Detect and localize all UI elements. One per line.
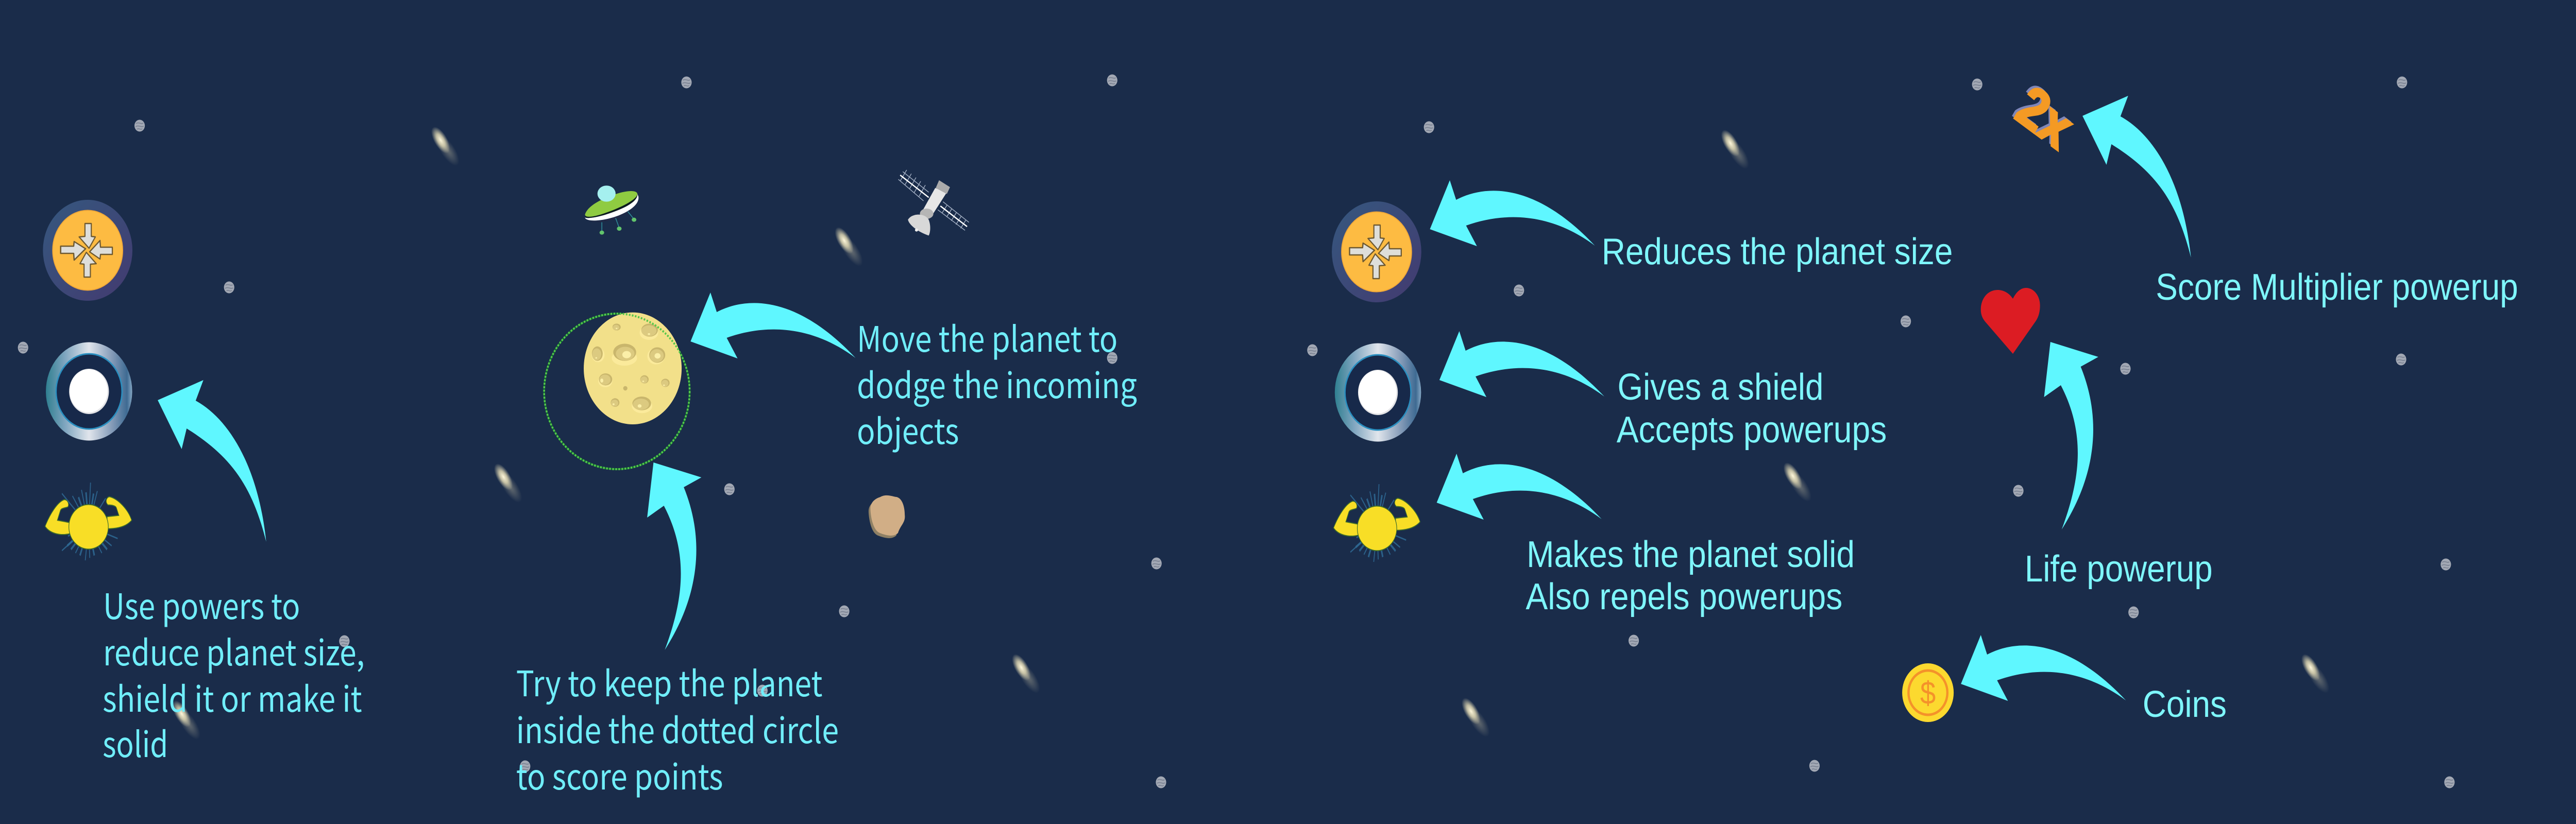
text: coins: Coins — [2143, 684, 2227, 725]
text: use powers: reduce planet size, — [103, 625, 365, 676]
icon: satellite — [899, 170, 969, 235]
arrow: to powers — [158, 380, 266, 542]
icon: shrink powerup — [1332, 201, 1421, 302]
text: use powers: solid — [103, 717, 168, 767]
icon: 2x multiplier: 2x — [2006, 72, 2081, 158]
text: gives a shield: Accepts powerups — [1617, 409, 1887, 451]
icon: shield powerup — [46, 342, 132, 441]
text: move the planet — [857, 312, 1137, 454]
text: keep the planet inside: Try to keep the planet — [516, 656, 822, 707]
arrow: to muscle powerup — [1437, 454, 1602, 520]
icon: shrink powerup — [43, 200, 132, 301]
text: makes the planet solid — [1526, 534, 1855, 617]
icon: asteroid — [869, 495, 905, 538]
text: reduces planet size: Reduces the planet size — [1602, 231, 1953, 272]
text: makes the planet solid: Also repels powerups — [1526, 576, 1842, 617]
panel: collectibles — [1902, 72, 2518, 725]
icon: coin — [1902, 663, 1954, 722]
panel: powerup legend — [1332, 180, 1953, 617]
text: gives a shield — [1617, 367, 1887, 451]
arrow: to moon — [690, 293, 856, 358]
text: keep the planet inside: inside the dotted circle — [516, 703, 839, 753]
icon: ufo — [585, 185, 638, 235]
icon: muscle powerup — [1333, 484, 1420, 562]
icon: shield powerup — [1335, 343, 1421, 442]
text: keep the planet inside — [516, 656, 839, 800]
text: gives a shield: Gives a shield — [1617, 367, 1823, 408]
text: use powers — [103, 579, 365, 767]
text: move the planet: objects — [857, 404, 959, 454]
text: use powers: shield it or make it — [103, 672, 362, 722]
text: keep the planet inside: to score points — [516, 749, 723, 800]
icon: heart — [1981, 288, 2040, 354]
icon: muscle powerup — [45, 483, 132, 560]
icon: 2x multiplier: 2x — [2007, 74, 2082, 161]
text: score multiplier: Score Multiplier powerup — [2156, 267, 2518, 308]
text: move the planet: Move the planet to — [857, 312, 1117, 362]
panel: use powers — [43, 200, 365, 767]
arrow: to heart — [2044, 342, 2098, 529]
arrow: to dotted circle — [647, 462, 701, 650]
arrow: to shield powerup — [1439, 331, 1604, 397]
icon: coin: $ — [1920, 676, 1936, 711]
icon: dotted circle and moon — [544, 313, 690, 469]
text: move the planet: dodge the incoming — [857, 358, 1137, 408]
panel: move the planet — [516, 170, 1137, 800]
text: makes the planet solid: Makes the planet solid — [1527, 534, 1855, 575]
text: life powerup: Life powerup — [2025, 548, 2213, 590]
arrow: to shrink powerup — [1430, 180, 1595, 246]
arrow: to coin — [1961, 635, 2126, 701]
arrow: to 2x — [2082, 96, 2191, 258]
text: use powers: Use powers to — [103, 579, 300, 629]
